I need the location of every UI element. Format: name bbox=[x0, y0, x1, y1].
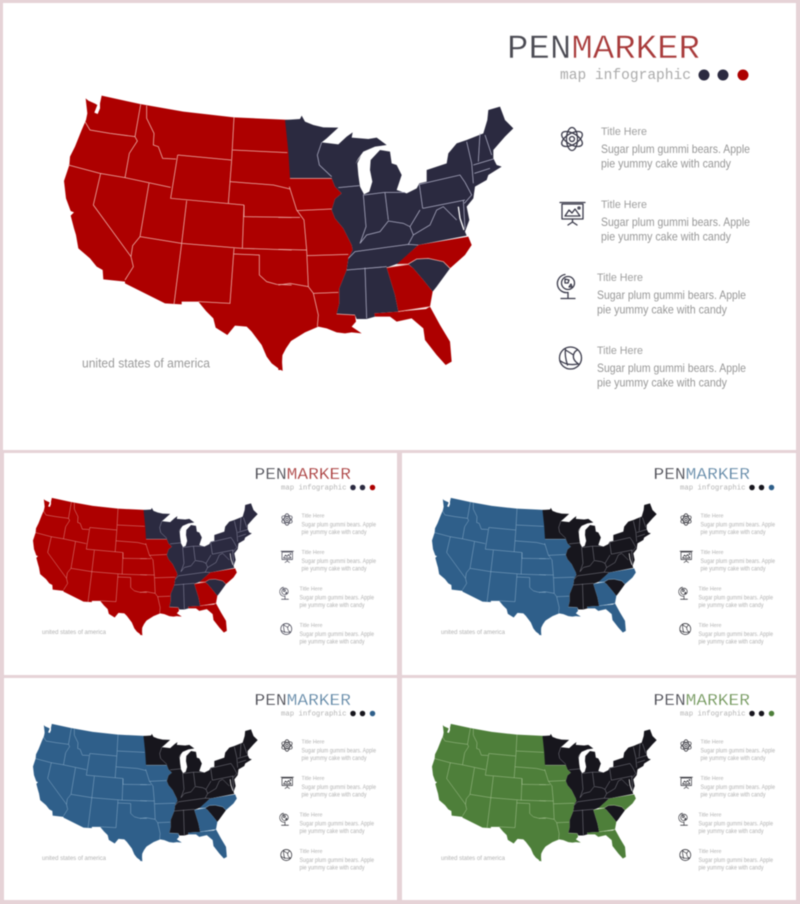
text block 2: Title Here bbox=[700, 550, 724, 556]
icon: world bbox=[680, 850, 691, 860]
text block 3: Title Here bbox=[300, 586, 322, 592]
text block 4: pie yummy cake with candy bbox=[698, 865, 764, 871]
map caption: united states of america bbox=[42, 629, 107, 636]
text block 3: Sugar plum gummi bears. Apple bbox=[698, 596, 774, 602]
text block 4: pie yummy cake with candy bbox=[698, 639, 764, 645]
map caption: united states of america bbox=[42, 855, 107, 862]
text block 3 bbox=[698, 812, 774, 835]
text block 4: Sugar plum gummi bears. Apple bbox=[300, 632, 375, 638]
text block 2: pie yummy cake with candy bbox=[302, 792, 366, 798]
text block 4: Sugar plum gummi bears. Apple bbox=[597, 361, 746, 375]
text block 4: pie yummy cake with candy bbox=[300, 639, 364, 645]
panel background bbox=[4, 453, 397, 675]
text block 3: pie yummy cake with candy bbox=[698, 829, 764, 835]
text block 2: Title Here bbox=[601, 199, 647, 211]
text block 4: Title Here bbox=[698, 623, 722, 629]
icon: desk globe bbox=[557, 274, 575, 298]
icon: presentation board bbox=[560, 202, 585, 225]
color dots bbox=[350, 485, 375, 490]
text block 4 bbox=[698, 849, 774, 871]
title: PENMARKER bbox=[254, 692, 351, 711]
color dots bbox=[350, 711, 375, 716]
color dots bbox=[698, 70, 748, 80]
text block 4: Sugar plum gummi bears. Apple bbox=[698, 632, 774, 638]
text block 3: Title Here bbox=[300, 812, 322, 818]
text block 4: Title Here bbox=[698, 849, 722, 855]
title: PENMARKER bbox=[654, 692, 750, 711]
icon: atom bbox=[281, 514, 293, 525]
text block 1: Sugar plum gummi bears. Apple bbox=[700, 522, 776, 528]
icon: world bbox=[281, 624, 292, 634]
text block 2: pie yummy cake with candy bbox=[601, 230, 731, 244]
icon: atom bbox=[680, 740, 692, 751]
text block 2: Sugar plum gummi bears. Apple bbox=[302, 785, 377, 791]
map: united states bbox=[432, 724, 657, 861]
text block 1: pie yummy cake with candy bbox=[302, 530, 366, 536]
panel: small green slide bbox=[402, 678, 796, 900]
slide content bbox=[64, 31, 750, 390]
icon: presentation board bbox=[281, 551, 294, 562]
icon: desk globe bbox=[679, 813, 688, 825]
text block 4: Title Here bbox=[300, 849, 322, 855]
map: united states bbox=[432, 498, 657, 635]
text block 4: pie yummy cake with candy bbox=[300, 865, 364, 871]
map caption: united states of america bbox=[441, 855, 506, 862]
icon: atom bbox=[559, 128, 585, 150]
text block 1: Sugar plum gummi bears. Apple bbox=[601, 142, 750, 156]
panel: small red slide bbox=[4, 453, 397, 675]
text block 3: Title Here bbox=[698, 586, 722, 592]
text block 1 bbox=[302, 514, 377, 536]
text block 4 bbox=[300, 623, 375, 645]
subtitle: map infographic bbox=[281, 484, 346, 492]
panel: small blue slide, top right bbox=[402, 453, 796, 675]
subtitle: map infographic bbox=[281, 710, 346, 718]
icon: world bbox=[560, 347, 582, 369]
text block 2: Sugar plum gummi bears. Apple bbox=[700, 559, 776, 565]
panel background bbox=[402, 678, 796, 900]
text block 2: pie yummy cake with candy bbox=[700, 566, 766, 572]
map: united states bbox=[64, 96, 513, 371]
panel: small blue slide, bottom left bbox=[4, 678, 397, 900]
slide content bbox=[432, 466, 776, 645]
text block 3: Sugar plum gummi bears. Apple bbox=[698, 822, 774, 828]
panel background bbox=[3, 3, 796, 450]
slide content bbox=[432, 692, 776, 871]
text block 2: Sugar plum gummi bears. Apple bbox=[700, 785, 776, 791]
text block 1: Title Here bbox=[700, 514, 724, 520]
text block 4: Title Here bbox=[300, 623, 322, 629]
text block 2 bbox=[700, 550, 776, 572]
color dots bbox=[749, 711, 774, 716]
panel: main red map slide bbox=[3, 3, 796, 450]
color dots bbox=[749, 485, 774, 490]
title: PENMARKER bbox=[254, 466, 351, 485]
text block 1 bbox=[700, 514, 776, 536]
text block 1: pie yummy cake with candy bbox=[601, 156, 731, 170]
icon: desk globe bbox=[280, 813, 288, 825]
text block 1 bbox=[302, 740, 377, 762]
text block 3: pie yummy cake with candy bbox=[698, 603, 764, 609]
text block 4: Sugar plum gummi bears. Apple bbox=[698, 858, 774, 864]
text block 2 bbox=[302, 550, 377, 572]
icon: presentation board bbox=[680, 777, 692, 788]
text block 1 bbox=[700, 740, 776, 762]
icon: desk globe bbox=[280, 587, 288, 599]
text block 3: pie yummy cake with candy bbox=[300, 603, 364, 609]
text block 3: Title Here bbox=[597, 272, 643, 284]
title: PENMARKER bbox=[507, 31, 700, 69]
text block 1: pie yummy cake with candy bbox=[700, 756, 766, 762]
text block 3: Title Here bbox=[698, 812, 722, 818]
text block 3 bbox=[300, 812, 375, 835]
slide content bbox=[33, 692, 377, 871]
text block 3 bbox=[698, 586, 774, 609]
text block 2: Sugar plum gummi bears. Apple bbox=[601, 215, 750, 229]
map caption: united states of america bbox=[82, 356, 210, 370]
text block 2: Title Here bbox=[302, 776, 324, 782]
icon: atom bbox=[680, 514, 692, 525]
icon: atom bbox=[281, 740, 293, 751]
text block 1: Title Here bbox=[601, 126, 647, 138]
icon: world bbox=[281, 850, 292, 860]
text block 1 bbox=[601, 126, 750, 170]
text block 2: Title Here bbox=[302, 550, 324, 556]
text block 1: Sugar plum gummi bears. Apple bbox=[302, 748, 377, 754]
map: united states bbox=[33, 498, 258, 635]
title: PENMARKER bbox=[654, 466, 750, 485]
subtitle: map infographic bbox=[680, 710, 746, 718]
text block 1: Title Here bbox=[302, 514, 324, 520]
text block 2: Title Here bbox=[700, 776, 724, 782]
text block 1: Sugar plum gummi bears. Apple bbox=[700, 748, 776, 754]
text block 2: pie yummy cake with candy bbox=[700, 792, 766, 798]
text block 1: Sugar plum gummi bears. Apple bbox=[302, 522, 377, 528]
icon: presentation board bbox=[680, 551, 692, 562]
text block 2: pie yummy cake with candy bbox=[302, 566, 366, 572]
text block 3: Sugar plum gummi bears. Apple bbox=[597, 288, 746, 302]
text block 4 bbox=[698, 623, 774, 645]
text block 4: pie yummy cake with candy bbox=[597, 376, 727, 390]
text block 3: pie yummy cake with candy bbox=[597, 302, 727, 316]
subtitle: map infographic bbox=[560, 68, 691, 84]
text block 3: Sugar plum gummi bears. Apple bbox=[300, 596, 375, 602]
text block 3: pie yummy cake with candy bbox=[300, 829, 364, 835]
map caption: united states of america bbox=[441, 629, 506, 636]
text block 4: Title Here bbox=[597, 345, 643, 357]
text block 2: Sugar plum gummi bears. Apple bbox=[302, 559, 377, 565]
text block 3 bbox=[300, 586, 375, 609]
text block 2 bbox=[302, 776, 377, 798]
panel background bbox=[402, 453, 796, 675]
map: united states bbox=[33, 724, 258, 861]
icon: world bbox=[680, 624, 691, 634]
text block 3: Sugar plum gummi bears. Apple bbox=[300, 822, 375, 828]
text block 1: Title Here bbox=[302, 740, 324, 746]
icon: desk globe bbox=[679, 587, 688, 599]
slide content bbox=[33, 466, 377, 645]
icon: presentation board bbox=[281, 777, 294, 788]
panel background bbox=[4, 678, 397, 900]
text block 2 bbox=[700, 776, 776, 798]
text block 1: pie yummy cake with candy bbox=[302, 756, 366, 762]
text block 3 bbox=[597, 272, 746, 316]
subtitle: map infographic bbox=[680, 484, 746, 492]
text block 4 bbox=[597, 345, 746, 390]
text block 4: Sugar plum gummi bears. Apple bbox=[300, 858, 375, 864]
text block 1: Title Here bbox=[700, 740, 724, 746]
text block 1: pie yummy cake with candy bbox=[700, 530, 766, 536]
text block 2 bbox=[601, 199, 750, 244]
text block 4 bbox=[300, 849, 375, 871]
